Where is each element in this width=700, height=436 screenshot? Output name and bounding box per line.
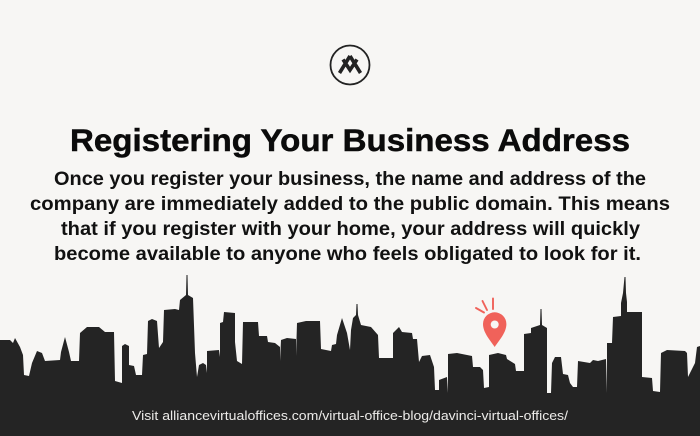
body text xyxy=(30,168,670,265)
body text: become available to anyone who feels obligated to look for it. xyxy=(54,243,641,265)
title: Registering Your Business Address xyxy=(70,122,630,158)
body text: company are immediately added to the public domain. This means xyxy=(30,193,670,215)
body text: that if you register with your home, your address will quickly xyxy=(61,218,640,240)
body text: Once you register your business, the name and address of the xyxy=(54,168,646,190)
logo: mountain monogram in circle xyxy=(330,46,370,84)
footer source link: Visit alliancevirtualoffices.com/virtual-office-blog/davinci-virtual-offices/ xyxy=(132,408,568,423)
icon: red location pin with rays xyxy=(476,298,506,347)
city skyline silhouette xyxy=(0,275,700,436)
